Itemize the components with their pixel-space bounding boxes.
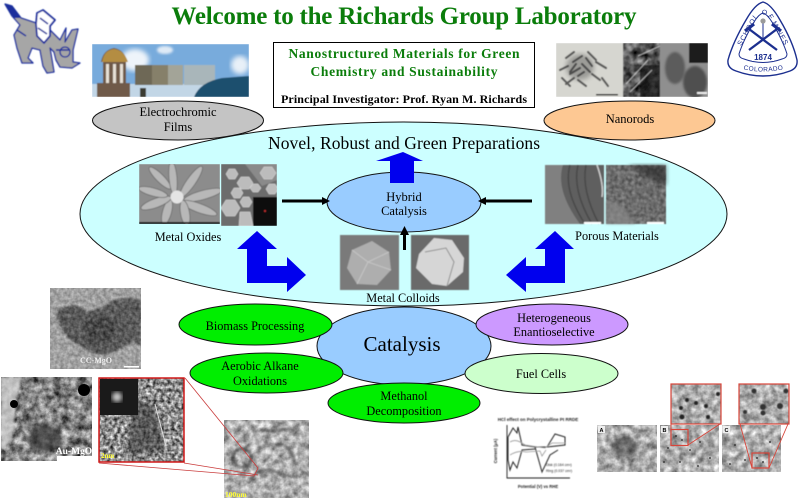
ellipse: Fuel Cells (465, 354, 618, 394)
panel: project title box: Chemistry and Sustainability (310, 64, 498, 79)
ellipse: Nanorods (544, 101, 715, 140)
ellipse: Fuel Cells: Fuel Cells (516, 367, 566, 381)
chart: cyclic voltammetry: HCl effect on Polycrystalline Pt RRDE (498, 417, 578, 422)
arrow: Porous to Hybrid (478, 197, 532, 205)
photo: nanorods micrographs (556, 43, 708, 98)
ellipse: Hybrid Catalysis: Catalysis (381, 204, 427, 218)
arrow: right blue double arrow (506, 231, 574, 292)
ellipse: Hybrid Catalysis (327, 172, 481, 232)
title: Welcome to the Richards Group Laboratory (172, 3, 637, 30)
ellipse: Electrochromic Films: Electrochromic (139, 105, 217, 119)
image: HRTEM with inset: 2nm (101, 452, 114, 460)
label: Porous Materials: Porous Materials (575, 229, 659, 243)
panel: central preparations ellipse (80, 122, 727, 306)
chart: cyclic voltammetry: Ring (0.037 cm²) (546, 469, 572, 473)
ellipse: Electrochromic Films: Films (164, 120, 192, 134)
image: metal oxide hexagons (221, 164, 278, 226)
ellipse: Heterogeneous Enantioselective (476, 304, 628, 345)
icon: School of Mines logo: COLORADO (744, 65, 782, 72)
callout: inset connector lines (671, 424, 788, 468)
ellipse: Catalysis: Catalysis (364, 332, 440, 356)
ellipse: Electrochromic Films (92, 101, 264, 140)
image: TEM panel C (722, 425, 781, 472)
heading: preparations: Novel, Robust and Green Preparations (268, 133, 540, 153)
image: Au-MgO micrograph (1, 377, 92, 461)
ellipse: Hybrid Catalysis: Hybrid (386, 190, 422, 204)
image: TEM inset of panel C (739, 384, 789, 424)
ellipse: Methanol Decomposition: Methanol (380, 389, 428, 403)
ellipse: Heterogeneous Enantioselective: Enantioselective (513, 325, 595, 339)
ellipse: Biomass Processing: Biomass Processing (206, 319, 304, 333)
label: Metal Oxides: Metal Oxides (155, 230, 222, 244)
ellipse: Catalysis (317, 307, 491, 385)
panel: project title box: Nanostructured Materials for Green (288, 46, 520, 61)
panel: project title box (274, 42, 534, 108)
ellipse: Aerobic Alkane Oxidations: Oxidations (233, 374, 287, 388)
label: Metal Colloids: Metal Colloids (366, 291, 440, 305)
image: porous material left (545, 165, 604, 224)
ellipse: Biomass Processing (179, 304, 332, 345)
icon: School of Mines logo: 1874 (754, 53, 772, 62)
ellipse: Heterogeneous Enantioselective: Heterogeneous (517, 311, 591, 325)
image: colloid polyhedron (411, 235, 469, 290)
image: colloid icosahedron (340, 235, 399, 290)
image: CC-MgO micrograph: CC-MgO (80, 356, 112, 365)
image: TEM panel A (597, 425, 657, 472)
icon: School of Mines logo (727, 1, 798, 77)
photo: electrochromic window (92, 44, 249, 97)
image: wide-field TEM (224, 420, 309, 499)
icon: donkey mascot (5, 4, 80, 73)
ellipse: Aerobic Alkane Oxidations: Aerobic Alkane (221, 359, 299, 373)
arrow: up from Hybrid Catalysis (376, 152, 423, 183)
arrow: Metal Oxides to Hybrid (282, 197, 330, 205)
ellipse: Methanol Decomposition: Decomposition (366, 404, 442, 418)
image: Au-MgO micrograph: Au-MgO (56, 447, 92, 457)
icon: School of Mines logo: SCHOOL OF MINES (738, 10, 788, 46)
chart: cyclic voltammetry (493, 417, 578, 489)
chart: cyclic voltammetry: Potential (V) vs RHE (518, 484, 558, 489)
image: TEM inset of panel B (671, 384, 721, 424)
image: CC-MgO micrograph (50, 288, 141, 369)
callout: zoom lines (99, 378, 258, 476)
image: TEM panel A: A (600, 428, 604, 434)
ellipse: Methanol Decomposition (328, 383, 480, 423)
ellipse: Nanorods: Nanorods (606, 112, 654, 126)
image: wide-field TEM: 100nm (225, 490, 247, 499)
image: TEM panel B (660, 425, 719, 472)
image: HRTEM with inset (99, 378, 184, 462)
ellipse: Aerobic Alkane Oxidations (190, 353, 343, 393)
image: porous material right (606, 165, 666, 224)
arrow: left blue double arrow (237, 231, 306, 292)
chart: cyclic voltammetry: Disk (0.164 cm²) (546, 463, 572, 467)
chart: cyclic voltammetry: Current (µA) (493, 438, 498, 463)
panel: project title box: Principal Investigator: Prof. Ryan M. Richards (281, 92, 527, 106)
image: TEM panel B: B (663, 428, 667, 434)
arrow: Colloids to Hybrid (400, 226, 409, 250)
image: metal oxide flower (139, 164, 220, 224)
image: TEM panel C: C (725, 428, 729, 434)
